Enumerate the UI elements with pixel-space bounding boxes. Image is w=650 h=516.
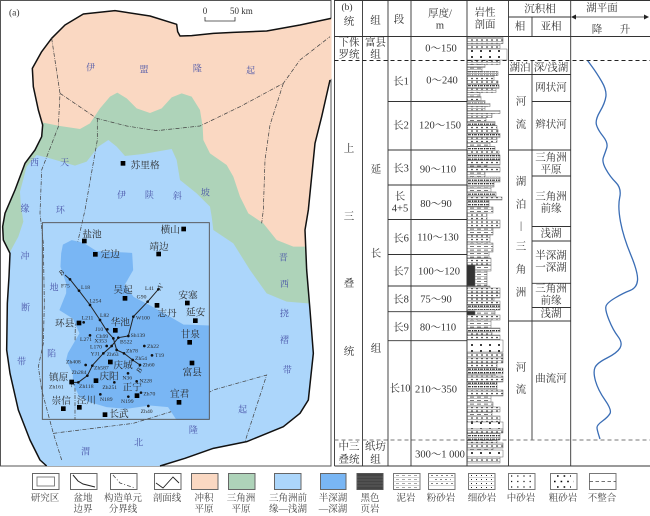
structural unit names: 挠 bbox=[280, 307, 289, 318]
thickness values: 0～150 bbox=[425, 44, 457, 54]
well labels: B522 bbox=[120, 340, 132, 346]
city labels: 环县 bbox=[55, 319, 75, 330]
member labels: 长2 bbox=[393, 120, 409, 132]
city labels: 宜君 bbox=[170, 388, 190, 400]
member labels: 长3 bbox=[393, 162, 409, 174]
legend: tectonic unit boundary bbox=[104, 474, 142, 515]
legend: siltstone: 粉砂岩 bbox=[427, 492, 456, 504]
subfacies labels: 平原 bbox=[540, 164, 562, 176]
legend: delta plain: 三角洲 bbox=[227, 492, 255, 504]
table header text: 统 bbox=[344, 14, 355, 28]
well labels: Zh54 bbox=[135, 356, 147, 362]
well labels: N228 bbox=[139, 379, 152, 385]
city labels: 庆城 bbox=[113, 360, 133, 372]
legend: basin boundary bbox=[70, 474, 97, 515]
structural unit names: 天 bbox=[60, 158, 69, 168]
legend: delta front to shallow lake: 三角洲前 bbox=[269, 492, 307, 504]
city labels: 泾川 bbox=[77, 395, 96, 406]
city labels: 崇信 bbox=[52, 395, 71, 407]
subfacies labels: 半深湖 bbox=[535, 248, 567, 262]
section endpoints: B' bbox=[134, 364, 145, 374]
city labels: 志丹 bbox=[157, 308, 177, 320]
structural unit names: 地 bbox=[50, 281, 59, 292]
legend bbox=[31, 474, 617, 515]
table header text: 岩性 bbox=[474, 6, 496, 18]
table header text: 沉积相 bbox=[524, 2, 556, 15]
well labels: Zh78 bbox=[126, 348, 138, 354]
well labels: L41 bbox=[145, 286, 154, 292]
city labels: 定边 bbox=[101, 249, 120, 261]
subfacies labels: 前缘 bbox=[540, 202, 562, 214]
structural unit names: 晋 bbox=[279, 252, 288, 262]
thickness values: 90～110 bbox=[420, 164, 456, 176]
legend: black shale: 黑色 bbox=[360, 492, 380, 504]
system and formation labels bbox=[338, 36, 386, 466]
system and formation labels: 纸坊 bbox=[365, 440, 386, 452]
section endpoints: A bbox=[67, 378, 77, 389]
region: delta front to shallow lake bbox=[7, 140, 313, 466]
structural unit names: 隆 bbox=[193, 63, 202, 74]
legend: mudstone: 泥岩 bbox=[396, 492, 416, 504]
system and formation labels: 组 bbox=[370, 454, 381, 466]
study area semi-deep lake and markers bbox=[42, 223, 209, 420]
section endpoints: A' bbox=[154, 282, 166, 293]
facies labels: 角 bbox=[516, 262, 526, 276]
structural unit names: 坡 bbox=[201, 187, 210, 198]
structural unit names: 西 bbox=[30, 158, 39, 168]
region: alluvial plain bbox=[33, 12, 332, 247]
city labels: 吴起 bbox=[113, 284, 133, 296]
structural unit names: 北 bbox=[134, 437, 143, 448]
table header text: 湖平面 bbox=[586, 1, 618, 14]
member labels: 长10 bbox=[390, 382, 410, 394]
table header text: m bbox=[436, 20, 444, 32]
city labels: 安塞 bbox=[178, 289, 198, 301]
panel: map (a) bbox=[0, 0, 333, 500]
subfacies labels: 深/浅湖 bbox=[534, 60, 569, 74]
system and formation labels: 中三 bbox=[338, 440, 360, 452]
structural unit names: 缘 bbox=[21, 202, 30, 213]
well labels: L18 bbox=[81, 285, 90, 291]
structural unit names: 起 bbox=[238, 403, 247, 414]
member labels: 长9 bbox=[393, 322, 409, 334]
structural unit names: 西 bbox=[280, 279, 289, 289]
legend: unconformity: 不整合 bbox=[588, 492, 617, 504]
well labels: L211 bbox=[82, 316, 94, 322]
structural unit names: 带 bbox=[283, 364, 292, 375]
facies labels: 河 bbox=[516, 96, 527, 108]
structural unit names: 伊 bbox=[86, 62, 95, 73]
structural unit names: 冲 bbox=[21, 250, 30, 261]
well labels: YJ1 bbox=[91, 352, 100, 358]
thickness values bbox=[415, 44, 465, 460]
city labels: 靖边 bbox=[149, 241, 169, 253]
legend: coarse sandstone bbox=[549, 474, 578, 504]
legend: semi-deep to deep lake: 半深湖 bbox=[319, 492, 348, 504]
facies labels: 流 bbox=[516, 118, 527, 130]
legend: delta front to shallow lake bbox=[269, 474, 307, 515]
legend: alluvial plain: 冲积 bbox=[194, 492, 214, 504]
structural unit names: 环 bbox=[56, 205, 66, 215]
subfacies labels: 三角洲 bbox=[535, 282, 567, 294]
city labels: 镇原 bbox=[49, 372, 69, 384]
system and formation labels: 富县 bbox=[365, 36, 386, 48]
thickness values: 80～90 bbox=[420, 199, 452, 210]
thickness values: 100～120 bbox=[418, 266, 460, 278]
city: Sulige bbox=[121, 159, 160, 171]
legend: section line bbox=[153, 474, 182, 504]
thickness values: 210～350 bbox=[415, 384, 457, 396]
facies labels bbox=[510, 60, 530, 396]
map body bbox=[0, 0, 333, 500]
system and formation labels: 罗统 bbox=[338, 48, 360, 60]
legend: tectonic unit boundary: 构造单元 bbox=[104, 492, 142, 504]
city labels: 正宁 bbox=[123, 382, 142, 394]
well labels: N189 bbox=[100, 397, 113, 403]
facies labels: 湖泊 bbox=[510, 60, 530, 74]
legend: black shale bbox=[357, 474, 383, 515]
table header text: 相 bbox=[515, 20, 525, 32]
legend: study area: 研究区 bbox=[31, 492, 60, 504]
region: semi-deep to deep lake bbox=[60, 241, 209, 419]
facies labels: 泊 bbox=[516, 198, 526, 210]
facies labels: 河 bbox=[516, 362, 527, 374]
system and formation labels: 上 bbox=[344, 142, 355, 154]
basin boundary bbox=[3, 11, 331, 466]
well labels: W100 bbox=[136, 315, 150, 321]
system and formation labels: 长 bbox=[371, 248, 382, 260]
city labels: 横山 bbox=[161, 224, 180, 236]
subfacies labels bbox=[534, 60, 569, 384]
scale bar bbox=[203, 6, 253, 21]
structural unit names bbox=[17, 62, 292, 457]
well markers bbox=[69, 278, 160, 407]
well labels: Zh22 bbox=[147, 344, 159, 350]
well labels: N199 bbox=[121, 399, 134, 405]
subfacies labels: 三角洲 bbox=[535, 150, 567, 164]
city labels: 延安 bbox=[186, 307, 206, 319]
table header text: 组 bbox=[370, 14, 381, 26]
section line B-B' bbox=[65, 275, 140, 365]
thickness values: 80～110 bbox=[420, 322, 456, 334]
thickness values: 75～90 bbox=[420, 294, 452, 306]
legend: delta plain: 平原 bbox=[231, 504, 251, 515]
well labels: T19 bbox=[155, 353, 164, 359]
subfacies labels: 网状河 bbox=[535, 80, 567, 94]
city labels bbox=[49, 224, 206, 420]
well labels: Zh284 bbox=[72, 370, 87, 376]
legend: section line: 剖面线 bbox=[153, 492, 182, 504]
section line A-A' bbox=[72, 289, 158, 382]
well labels: Zh161 bbox=[49, 384, 64, 390]
member labels: 长6 bbox=[393, 232, 409, 244]
member labels: 4+5 bbox=[392, 204, 408, 214]
table header text: (b) bbox=[341, 2, 353, 13]
structural unit names: 隆 bbox=[189, 424, 198, 435]
legend: alluvial plain: 平原 bbox=[194, 504, 214, 515]
system and formation labels: 叠 bbox=[344, 276, 355, 290]
structural unit names: 带 bbox=[17, 356, 26, 367]
table header text: 段 bbox=[394, 14, 405, 26]
legend: mudstone bbox=[394, 474, 420, 504]
well labels bbox=[49, 283, 164, 415]
subfacies labels: 曲流河 bbox=[535, 372, 567, 384]
legend: fine sandstone bbox=[468, 474, 497, 504]
facies labels: 三 bbox=[516, 240, 527, 252]
structural unit names: 渭 bbox=[81, 447, 90, 457]
facies labels: 洲 bbox=[516, 286, 526, 298]
subfacies labels: 浅湖 bbox=[540, 226, 562, 240]
legend: unconformity bbox=[588, 474, 617, 504]
legend: basin boundary: 边界 bbox=[73, 503, 93, 515]
well labels: Zh587 bbox=[94, 365, 109, 371]
scale bar: 50 km bbox=[230, 6, 253, 16]
table grid bbox=[334, 0, 650, 466]
structural unit names: 陕 bbox=[145, 189, 154, 200]
structural unit names: 断 bbox=[21, 302, 30, 313]
thickness values: 120～150 bbox=[419, 120, 461, 132]
table header text: 升 bbox=[620, 22, 631, 36]
geological regions bbox=[3, 12, 332, 466]
system and formation labels: 叠统 bbox=[338, 452, 360, 466]
thickness values: 0～240 bbox=[426, 76, 458, 86]
lithology column bbox=[467, 38, 507, 463]
city labels: 甘泉 bbox=[181, 328, 200, 340]
table header text: 剖面 bbox=[474, 18, 496, 30]
legend: black shale: 页岩 bbox=[360, 503, 380, 515]
facies labels: 湖 bbox=[516, 174, 527, 188]
section endpoints: B bbox=[57, 268, 67, 277]
system and formation labels: 组 bbox=[371, 342, 382, 354]
legend: siltstone bbox=[427, 474, 456, 504]
legend: alluvial plain bbox=[192, 474, 218, 515]
city labels: 庆阳 bbox=[99, 370, 119, 382]
well labels: Zh40 bbox=[141, 409, 153, 415]
system and formation labels: 组 bbox=[370, 48, 381, 60]
well labels: Zh408 bbox=[66, 359, 81, 365]
well labels: F75 bbox=[61, 283, 70, 289]
table header text bbox=[341, 1, 631, 36]
member labels: 长8 bbox=[393, 294, 409, 306]
system and formation labels: 三 bbox=[344, 210, 355, 222]
well labels: Zh251 bbox=[102, 385, 117, 391]
member labels: 长1 bbox=[393, 76, 409, 88]
legend: semi-deep to deep lake: —深湖 bbox=[318, 503, 348, 515]
legend: delta front to shallow lake: 缘—浅湖 bbox=[269, 503, 307, 515]
well labels: Zh118 bbox=[79, 384, 94, 390]
structural unit names: 盟 bbox=[140, 64, 149, 74]
structural unit names: 褶 bbox=[280, 335, 289, 345]
well labels: J10 bbox=[95, 327, 103, 333]
thickness values: 300～1 000 bbox=[415, 450, 465, 460]
subfacies labels: 浅湖 bbox=[540, 306, 562, 320]
subfacies labels: 三角洲 bbox=[535, 190, 567, 202]
panel: stratigraphic column (b) bbox=[334, 0, 650, 466]
city labels: 长武 bbox=[109, 408, 129, 420]
well labels: Zh60 bbox=[143, 362, 155, 368]
subfacies labels: 前缘 bbox=[540, 294, 562, 306]
table header text: 降 bbox=[592, 22, 603, 36]
legend: medium sandstone bbox=[507, 474, 536, 504]
region: delta plain bbox=[3, 92, 309, 304]
tectonic unit boundaries bbox=[38, 37, 330, 460]
lake level axis arrow bbox=[571, 14, 649, 20]
city: Sulige: 苏里格 bbox=[131, 159, 160, 171]
well labels: L82 bbox=[100, 313, 109, 319]
facies labels: | bbox=[520, 220, 522, 232]
scale bar: 0 bbox=[203, 6, 208, 16]
well labels: Zh63 bbox=[107, 352, 119, 358]
study area rectangle bbox=[42, 223, 209, 419]
panel label (a): (a) bbox=[9, 8, 20, 18]
thickness values: 110～130 bbox=[417, 232, 459, 244]
legend: study area bbox=[31, 474, 60, 504]
legend: fine sandstone: 细砂岩 bbox=[468, 492, 497, 504]
well labels: Zh70 bbox=[143, 391, 155, 397]
well labels: N36 bbox=[122, 375, 132, 381]
system and formation labels: 延 bbox=[371, 162, 382, 176]
legend: delta plain bbox=[227, 474, 255, 515]
legend: tectonic unit boundary: 分界线 bbox=[109, 503, 138, 515]
well labels: X353 bbox=[94, 339, 107, 345]
structural unit names: 起 bbox=[246, 64, 255, 75]
structural unit names: 伊 bbox=[117, 189, 126, 200]
well labels: Sh139 bbox=[131, 333, 145, 339]
legend: coarse sandstone: 粗砂岩 bbox=[549, 492, 578, 504]
map frame bbox=[0, 0, 331, 466]
system and formation labels: 统 bbox=[344, 344, 355, 358]
well labels: L271 bbox=[80, 337, 92, 343]
subfacies labels: 一深湖 bbox=[535, 260, 567, 274]
legend: basin boundary: 盆地 bbox=[73, 492, 93, 504]
city markers bbox=[61, 227, 198, 417]
subfacies labels: 辫状河 bbox=[535, 118, 567, 130]
member labels: 长 bbox=[395, 190, 406, 202]
legend: semi-deep to deep lake bbox=[318, 474, 348, 515]
lake level curve bbox=[588, 61, 638, 439]
legend: medium sandstone: 中砂岩 bbox=[507, 492, 536, 504]
city labels: 盐池 bbox=[82, 228, 102, 240]
member labels bbox=[390, 76, 410, 394]
well labels: L254 bbox=[89, 299, 101, 305]
structural unit names: 斜 bbox=[173, 190, 182, 201]
table header text: 亚相 bbox=[540, 20, 562, 32]
structural unit names: 陷 bbox=[47, 348, 56, 358]
section endpoints bbox=[57, 268, 166, 389]
well labels: Ch99 bbox=[96, 334, 108, 340]
well labels: L170 bbox=[90, 345, 102, 351]
city labels: 华池 bbox=[111, 316, 130, 328]
system and formation labels: 下侏 bbox=[338, 36, 360, 48]
facies labels: 流 bbox=[516, 382, 527, 396]
well labels: G90 bbox=[137, 295, 147, 301]
table header text: 厚度/ bbox=[428, 6, 452, 20]
member labels: 长7 bbox=[393, 266, 409, 278]
city labels: 富县 bbox=[183, 367, 202, 379]
